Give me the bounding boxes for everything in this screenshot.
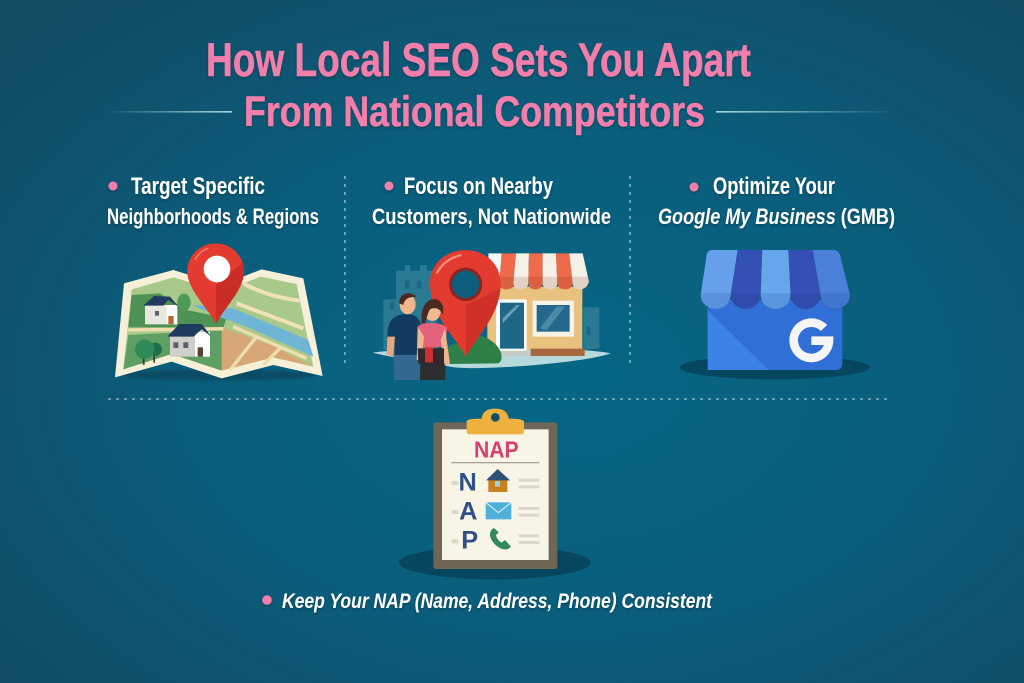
icon: folded map with pin <box>115 243 323 380</box>
heading: optimize google my business: Google My Business (GMB) <box>658 204 895 229</box>
heading: optimize google my business <box>658 173 895 229</box>
title: From National Competitors <box>244 88 705 136</box>
heading: target specific neighborhoods: Neighborhoods & Regions <box>107 204 319 229</box>
icon: nap clipboard <box>399 409 591 579</box>
bush <box>446 336 502 364</box>
house: front <box>167 324 211 357</box>
city skyline <box>383 265 599 350</box>
heading: target specific neighborhoods <box>107 173 319 229</box>
pin <box>430 250 501 357</box>
couple <box>387 293 450 380</box>
icon: storefront with couple and pin <box>373 250 611 380</box>
map pin <box>187 243 244 324</box>
icon: house <box>486 469 510 492</box>
title <box>206 33 751 136</box>
google g <box>794 323 829 358</box>
row placeholder lines <box>452 479 539 544</box>
heading: optimize google my business: Optimize Your <box>713 173 835 200</box>
icon: phone <box>490 528 511 549</box>
row letters <box>459 469 478 555</box>
row letters: N <box>459 469 477 497</box>
title: How Local SEO Sets You Apart <box>206 33 751 86</box>
heading: focus on nearby customers: Customers, Not Nationwide <box>372 204 611 229</box>
house: back <box>143 296 178 324</box>
awning <box>488 253 589 289</box>
column dividers <box>108 176 888 399</box>
caption: keep nap consistent: Keep Your NAP (Name, Address, Phone) Consistent <box>282 590 713 613</box>
heading: focus on nearby customers: Focus on Nearby <box>404 173 553 200</box>
icon: google my business store <box>680 250 870 379</box>
clipboard heading: NAP <box>474 436 519 462</box>
row letters: P <box>461 527 478 555</box>
ground <box>373 348 611 368</box>
icon: envelope <box>486 502 511 519</box>
row letters: A <box>459 497 477 525</box>
trees <box>135 340 162 365</box>
heading: focus on nearby customers <box>372 173 611 229</box>
shop <box>487 287 585 356</box>
heading: target specific neighborhoods: Target Specific <box>131 173 265 200</box>
